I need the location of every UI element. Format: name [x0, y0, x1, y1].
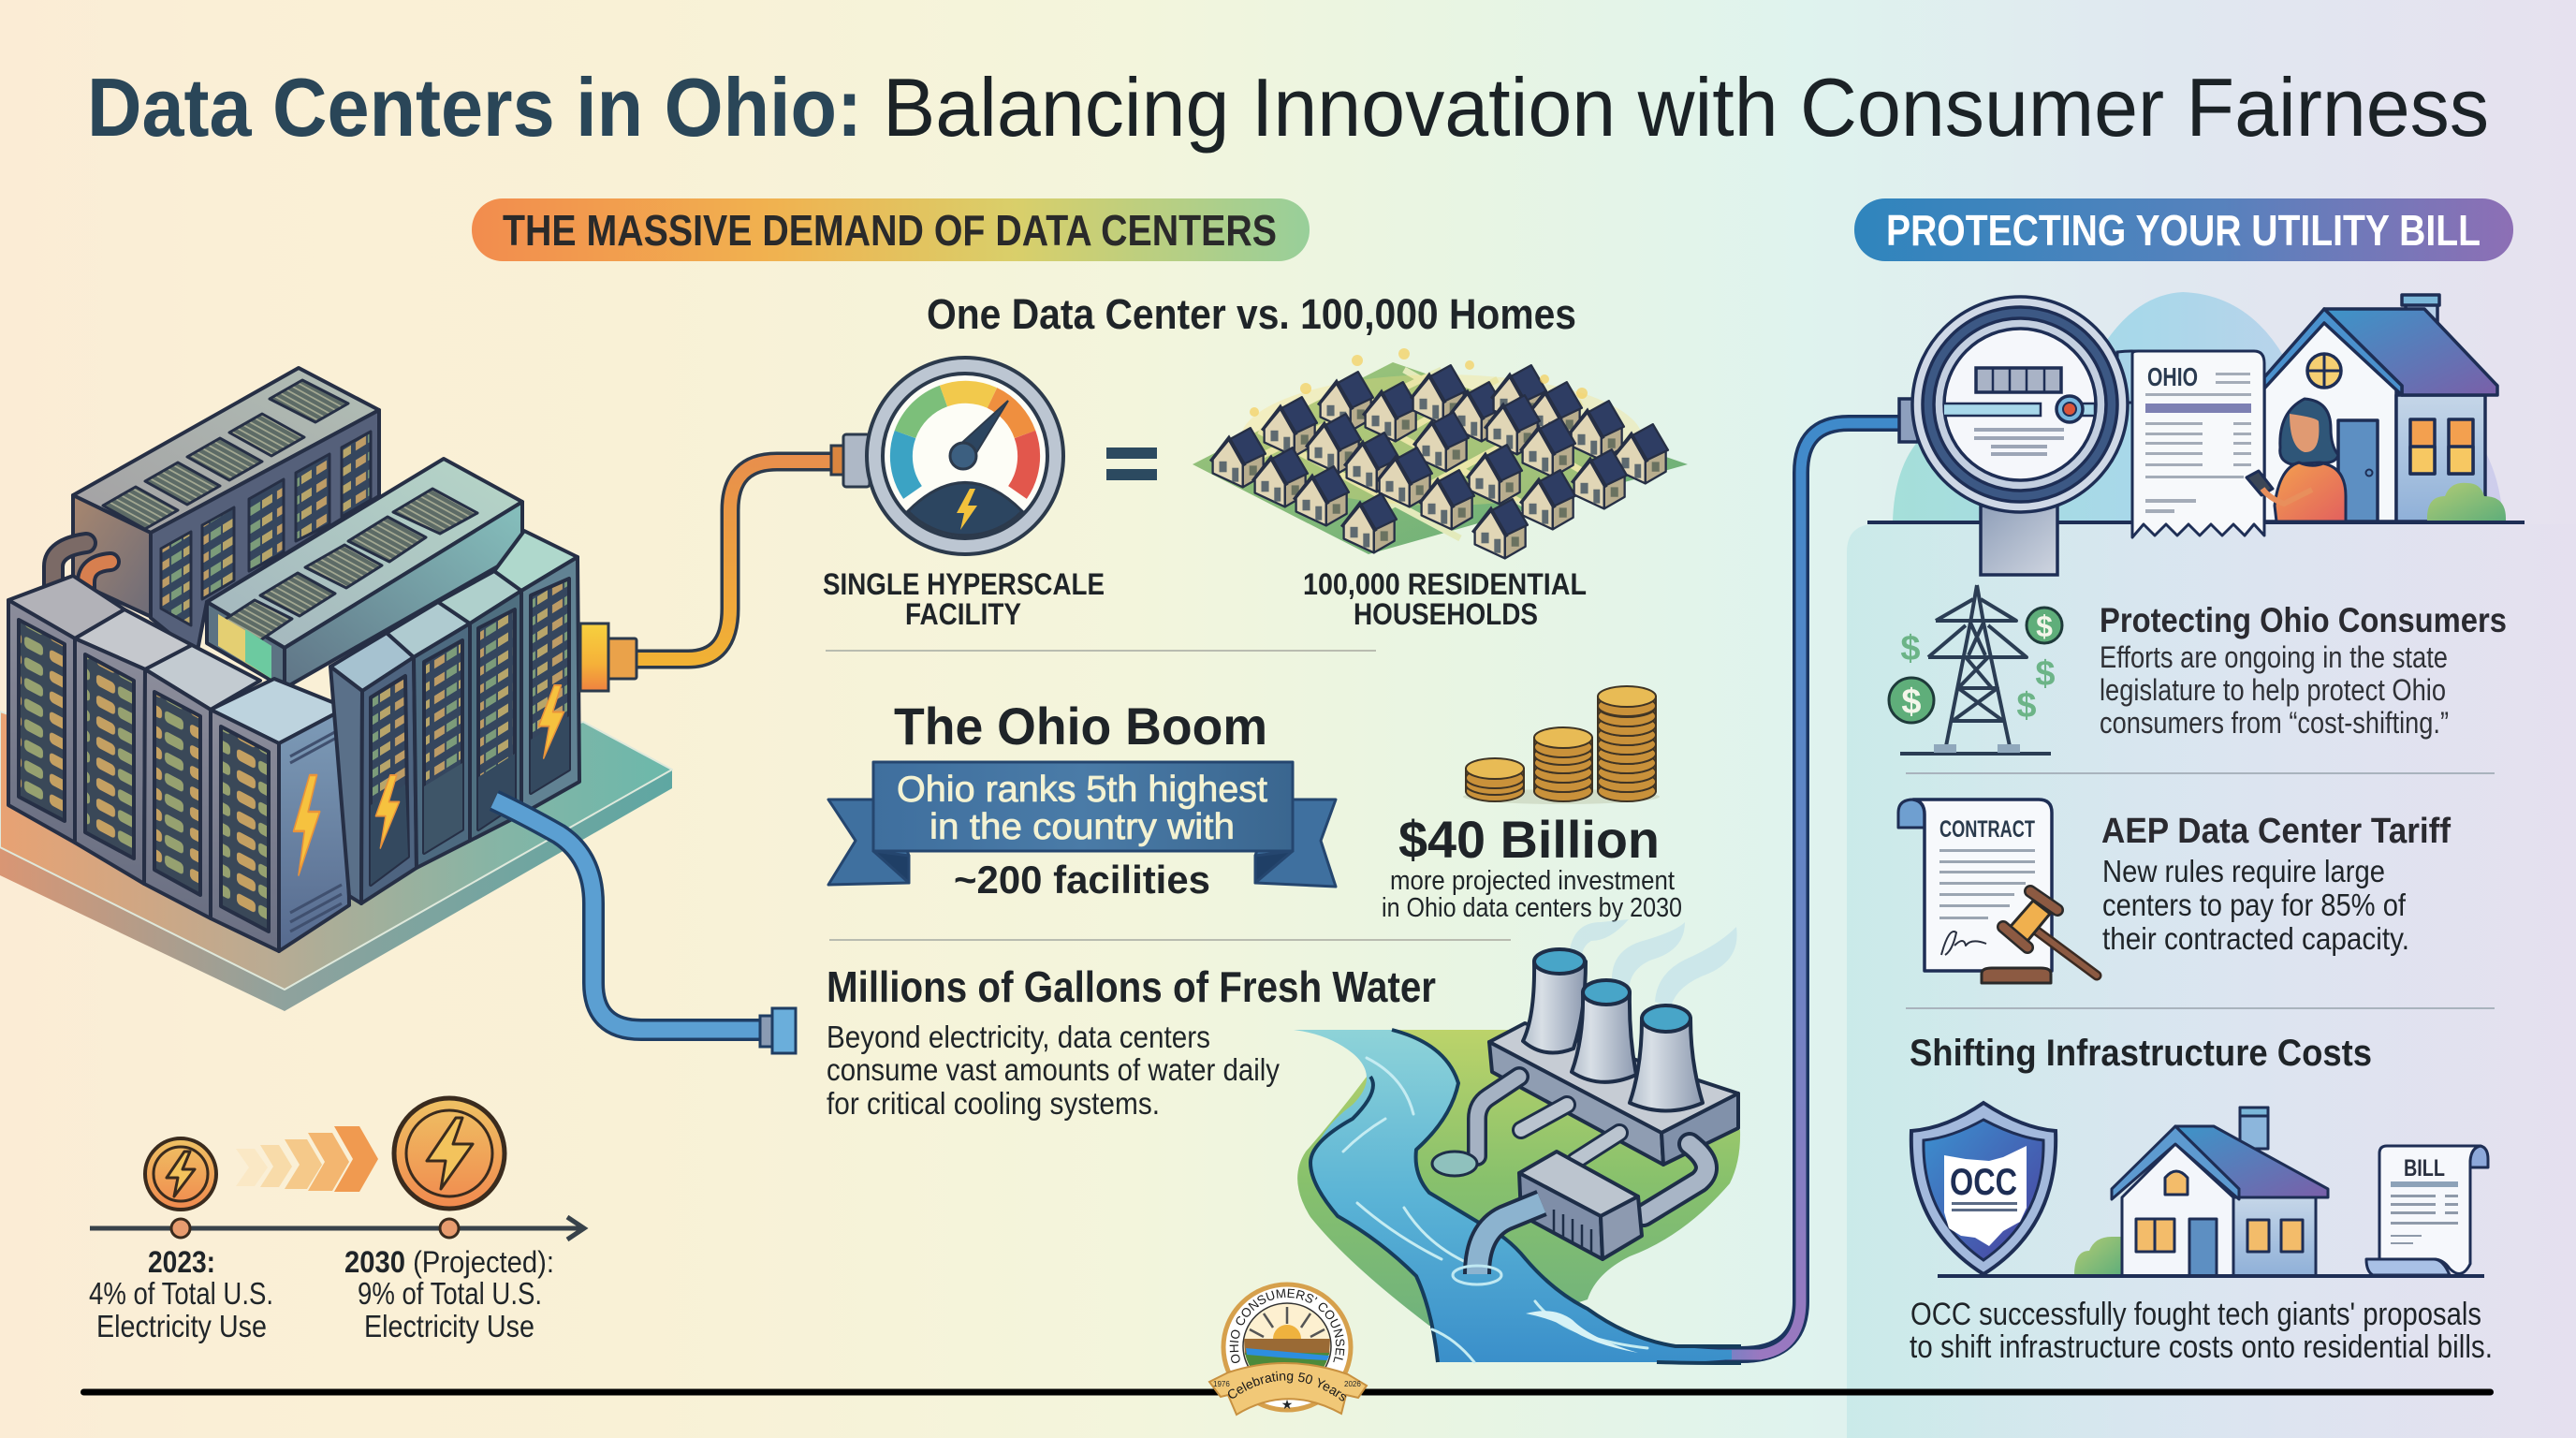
illustration: isometric data center: [0, 368, 672, 1011]
title: [87, 61, 2489, 154]
back server block: [73, 368, 379, 655]
front-right server racks: [330, 531, 579, 903]
icon: bill scroll: BILL: [2404, 1155, 2445, 1181]
stat: 40 billion: $40 Billion: [1398, 810, 1660, 869]
label: single hyperscale facility: [823, 567, 1105, 631]
banner: ohio ranks 5th: Ohio ranks 5th highest: [897, 770, 1267, 810]
illustration: neighborhood of houses: [1193, 348, 1688, 558]
heading: the massive demand of data centers: [472, 198, 1310, 261]
heading: the ohio boom: The Ohio Boom: [894, 697, 1267, 756]
label: residential households: 100,000 RESIDENTIAL: [1303, 567, 1587, 601]
icon: house: [2074, 1108, 2328, 1276]
house: [2264, 295, 2497, 521]
stat: 40 billion: [1382, 810, 1682, 923]
label: 2030: 9% of Total U.S.: [358, 1276, 542, 1311]
river: [1294, 1030, 1732, 1362]
label: 2023: [89, 1245, 273, 1343]
illustration: ohio utility bill: OHIO: [2147, 362, 2198, 391]
icon: contract and gavel: CONTRACT: [1939, 816, 2035, 843]
lightning bolt: front rack: [294, 775, 320, 875]
section: shifting infrastructure costs: [1910, 1033, 2493, 1365]
heading: AEP Data Center Tariff: [2101, 812, 2451, 851]
green land: [1297, 1030, 1740, 1329]
body text: their contracted capacity.: [2102, 921, 2409, 956]
steam: [1569, 919, 1737, 1006]
text: water body: Beyond electricity, data centers: [827, 1020, 1210, 1054]
person with phone: [2247, 399, 2346, 521]
banner: ohio ranks 5th: [828, 762, 1336, 887]
dome behind meter and home: [1893, 292, 2503, 521]
heading: the massive demand of data centers: THE MASSIVE DEMAND OF DATA CENTERS: [503, 206, 1277, 255]
icon: bill scroll: [2366, 1146, 2488, 1275]
seal: ohio consumers counsel logo: Celebrating 50 Years: [1228, 1371, 1346, 1401]
equals sign: [1106, 448, 1157, 480]
label: 2023: 4% of Total U.S.: [89, 1276, 273, 1311]
cooling pipes on roof: [53, 543, 110, 605]
timeline: electricity use growth: [89, 1098, 584, 1343]
floor slab: [0, 712, 672, 1011]
seal: ohio consumers counsel logo: ★: [1281, 1397, 1293, 1412]
outflow pipe: [1453, 1203, 1542, 1284]
illustration: ohio utility bill: [2117, 351, 2264, 537]
body text: [2100, 640, 2449, 740]
cooling towers: [1523, 949, 1703, 1110]
label: 2023: Electricity Use: [96, 1309, 267, 1343]
text: 200 facilities: ~200 facilities: [954, 858, 1210, 902]
label: 2030: 2030 (Projected):: [344, 1245, 554, 1279]
middle server block: [207, 459, 522, 688]
body text: Efforts are ongoing in the state: [2100, 640, 2448, 674]
body text: OCC successfully fought tech giants' proposals: [1910, 1297, 2481, 1332]
title: Data Centers in Ohio:: [87, 61, 862, 154]
ground line: [1938, 1274, 2484, 1278]
text: water body: [827, 1020, 1280, 1121]
body text: to shift infrastructure costs onto residential bills.: [1910, 1329, 2493, 1365]
label: 2023: 2023:: [148, 1245, 215, 1279]
heading: protecting your utility bill: [1854, 198, 2513, 261]
coin: 2023: [145, 1138, 216, 1210]
icon: transmission tower with dollars: $: [2035, 654, 2056, 694]
section: protecting ohio consumers: [1889, 585, 2507, 756]
seal: ohio consumers counsel logo: [1208, 1283, 1368, 1416]
label: single hyperscale facility: SINGLE HYPERSCALE: [823, 567, 1105, 601]
stat: 40 billion: more projected investment: [1390, 866, 1675, 896]
pipes: [1432, 1077, 1706, 1215]
illustration: home: [2264, 295, 2506, 521]
heading: millions of gallons: Millions of Gallons of Fresh Water: [827, 962, 1436, 1011]
body text: [1910, 1297, 2493, 1365]
icon: transmission tower with dollars: [1889, 585, 2062, 756]
icon: transmission tower with dollars: $: [1901, 682, 1922, 722]
label: 2030: [344, 1245, 554, 1343]
seal: ohio consumers counsel logo: 2026: [1344, 1380, 1361, 1388]
timeline axis: [90, 1217, 584, 1240]
body text: New rules require large: [2102, 854, 2385, 888]
growth chevrons: [236, 1126, 378, 1192]
pipe: power line to gauge: [580, 462, 833, 691]
icon: occ shield: OCC: [1950, 1162, 2017, 1203]
icon: occ shield: [1911, 1103, 2056, 1274]
lightning bolts: right racks: [375, 685, 564, 848]
coin: 2030: [394, 1098, 505, 1209]
seal: ohio consumers counsel logo: 1976: [1213, 1380, 1230, 1388]
body text: [2102, 854, 2409, 956]
text: water body: consume vast amounts of water daily: [827, 1052, 1280, 1087]
stat: 40 billion: in Ohio data centers by 2030: [1382, 893, 1682, 923]
heading: protecting your utility bill: PROTECTING YOUR UTILITY BILL: [1886, 206, 2481, 255]
label: residential households: [1303, 567, 1587, 631]
section: aep data center tariff: [1898, 800, 2451, 983]
icon: transmission tower with dollars: $: [2016, 686, 2037, 726]
bush: [2427, 483, 2506, 521]
pipe: water line from data center: [494, 800, 796, 1053]
label: 2030: Electricity Use: [364, 1309, 534, 1343]
pump box: [1519, 1152, 1642, 1259]
body text: centers to pay for 85% of: [2102, 888, 2407, 922]
body text: consumers from “cost-shifting.”: [2100, 706, 2449, 740]
bottom rule: [80, 1389, 2494, 1395]
label: single hyperscale facility: FACILITY: [905, 597, 1021, 631]
icon: contract and gavel: [1898, 800, 2097, 983]
front-left server racks: [8, 576, 349, 951]
label: residential households: HOUSEHOLDS: [1354, 597, 1538, 631]
illustration: river and cooling towers: [1294, 919, 1741, 1363]
ground line: [1867, 521, 2525, 524]
pipe: utility connection line: [1676, 423, 1900, 1355]
panel: right consumer section background: [1847, 524, 2576, 1438]
text: water body: for critical cooling systems.: [827, 1086, 1160, 1121]
title: Balancing Innovation with Consumer Fairness: [883, 61, 2489, 154]
heading: one data center vs homes: One Data Center vs. 100,000 Homes: [927, 290, 1576, 338]
plant base: [1489, 1023, 1738, 1165]
heading: Protecting Ohio Consumers: [2100, 601, 2507, 639]
body text: legislature to help protect Ohio: [2100, 673, 2446, 707]
banner: ohio ranks 5th: in the country with: [929, 807, 1235, 847]
illustration: electric meter: [1899, 297, 2128, 575]
seal: ohio consumers counsel logo: OHIO CONSUMERS' COUNSEL: [1230, 1288, 1344, 1363]
icon: transmission tower with dollars: $: [2036, 609, 2053, 643]
icon: coin stacks: [1463, 686, 1660, 804]
icon: transmission tower with dollars: $: [1900, 629, 1921, 668]
icon: power gauge: [831, 358, 1063, 554]
heading: Shifting Infrastructure Costs: [1910, 1033, 2372, 1074]
